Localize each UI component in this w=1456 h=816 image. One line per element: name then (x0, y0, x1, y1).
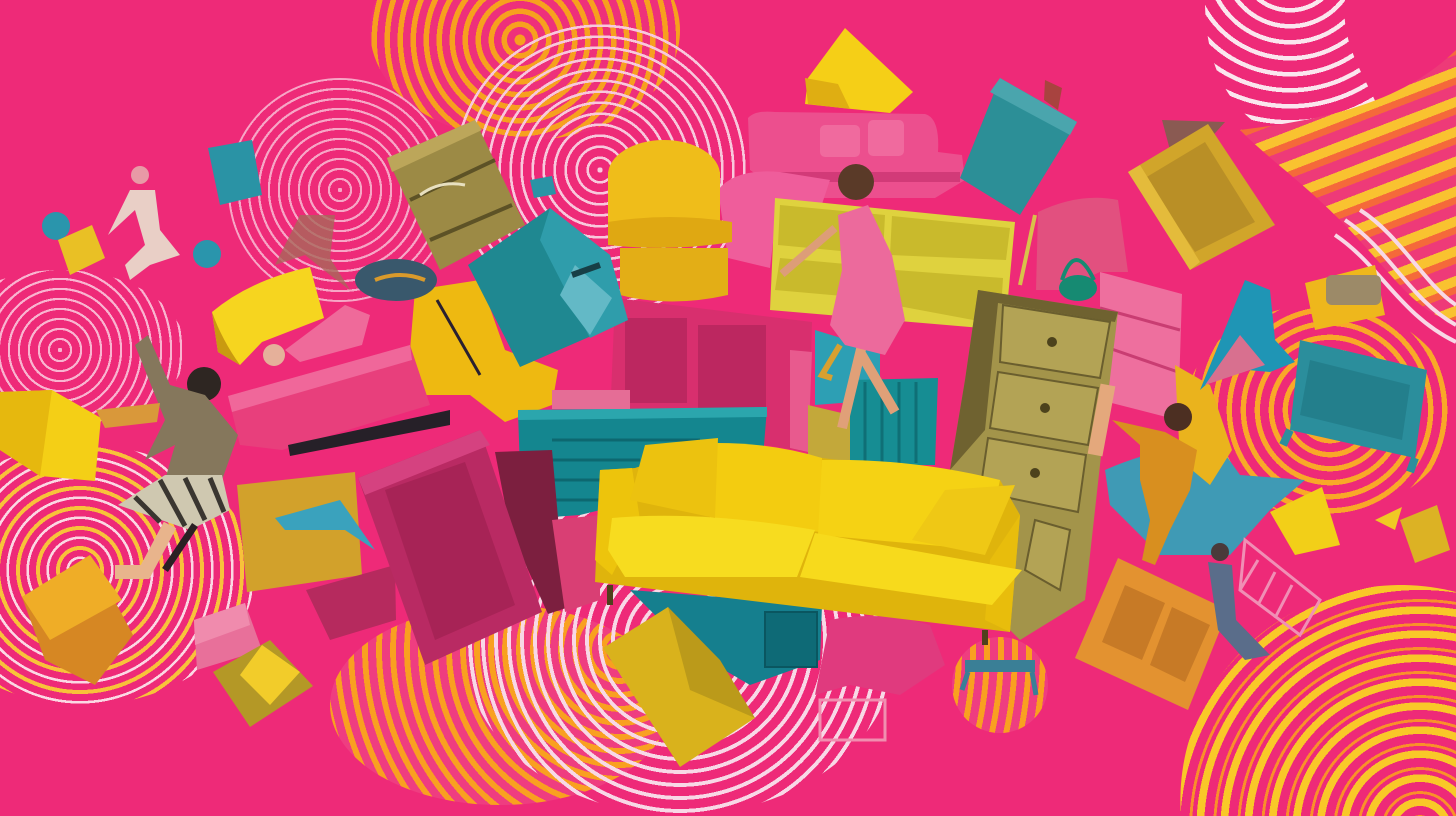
furniture: pink box lower left (194, 603, 262, 670)
swirl: top right white waves (1205, 0, 1385, 135)
furniture: teal stool and yellow box far left (42, 212, 221, 275)
furniture: khaki cabinet top left (387, 120, 525, 270)
furniture: yellow sofa (595, 438, 1022, 645)
furniture: pink crumpled fabric (815, 616, 945, 740)
furniture: yellow chair middle (410, 280, 558, 422)
furniture: orange door crate (1075, 558, 1228, 710)
swirl: upper left pink rings (228, 78, 452, 302)
swirl: top centre white rings (452, 22, 748, 318)
swirl: top centre orange rings (370, 0, 680, 140)
furniture: small pink box on dresser (552, 390, 630, 409)
swirl: bottom centre orange rings (330, 605, 670, 805)
furniture: pink desk (228, 345, 450, 456)
furniture: yellow chest of drawers (770, 198, 1015, 330)
furniture: teal dresser (518, 407, 767, 517)
furniture: small stool below sofa (962, 660, 1036, 695)
furniture: teal box with drawers (468, 208, 628, 367)
furniture: yellow box bottom (603, 607, 755, 767)
furniture: yellow curved chair left (212, 267, 324, 365)
furniture: khaki crate top right (1128, 120, 1275, 270)
icon: green kettle (1059, 260, 1097, 301)
furniture: yellow box with sofa (1305, 265, 1385, 330)
furniture: small yellow box far right (1375, 505, 1450, 563)
swirl: bottom right rings (1180, 585, 1456, 816)
furniture: yellow diamond right (1270, 487, 1340, 555)
swirl: left pink rings (0, 270, 186, 430)
figure: woman with striped skirt (115, 335, 238, 572)
swirl: right orange rings (1185, 305, 1455, 515)
furniture: teal chair right (1200, 280, 1295, 390)
figure: woman in white top left (108, 166, 180, 280)
furniture: orange crate left (22, 555, 133, 685)
swirl: lower left rings (0, 445, 254, 705)
swirl: bottom centre white rings (465, 485, 895, 815)
furniture: pink crib lower right (1240, 540, 1320, 635)
furniture: small orange basket left (96, 403, 160, 428)
furniture: magenta cabinet (610, 298, 812, 452)
furniture: khaki tall dresser (950, 290, 1118, 640)
furniture: yellow polygon left (0, 390, 101, 481)
furniture: pink armchair right (1020, 198, 1128, 290)
furniture: blue fabric and radiator (808, 330, 938, 465)
furniture: blue fabric right (1105, 365, 1305, 555)
furniture: magenta wardrobe (358, 430, 542, 665)
furniture: small teal box (530, 176, 556, 198)
furniture: pink armchair behind (718, 171, 830, 268)
furniture: small yellow box lower left (213, 640, 313, 727)
swirl: top right orange waves (1240, 50, 1456, 320)
furniture: teal box top left (208, 140, 262, 205)
swirl: right white waves (1335, 210, 1456, 342)
furniture: teal cabinet under sofa (630, 590, 822, 685)
furniture: pink drawers right (1100, 272, 1182, 420)
figure: person lying on desk (263, 305, 370, 366)
figure: man in orange (1095, 385, 1197, 565)
furniture: yellow cylinder stool (608, 140, 732, 302)
figure: blurred person upper left (275, 215, 350, 290)
furniture: khaki cardboard box (237, 472, 375, 592)
figure: walking man lower right (1208, 543, 1270, 660)
furniture: teal box top (960, 78, 1077, 215)
furniture: yellow diamond box top (805, 28, 913, 113)
swirl: lower middle orange rings (952, 637, 1048, 733)
furniture: round bowl side table (355, 259, 480, 375)
furniture: maroon chair behind wardrobe (306, 450, 600, 640)
furniture: pink sofa top (748, 112, 965, 198)
figure: jumping woman in pink (782, 164, 905, 428)
furniture: teal cabinet right (1283, 340, 1427, 472)
